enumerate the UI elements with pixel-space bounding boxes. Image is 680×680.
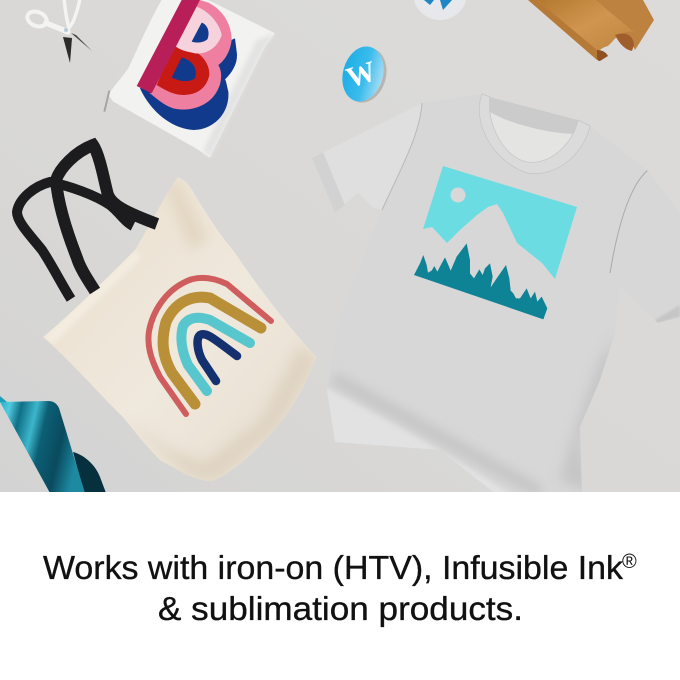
bag body: [43, 177, 317, 481]
right side shadow: [562, 349, 609, 489]
letter B pale bowl: [176, 7, 222, 54]
letter B pink: [150, 0, 232, 110]
pouch right edge shade: [203, 33, 275, 157]
caption text: [43, 549, 637, 627]
back collar band: [490, 97, 578, 134]
icon: scissors: [25, 0, 92, 63]
teal foil roll: [0, 396, 106, 493]
badge: blue W: W: [343, 55, 380, 95]
right shoulder seam: [610, 170, 648, 273]
front strap: [56, 145, 157, 291]
tote bag with rainbow: [17, 145, 318, 482]
pouch body: [108, 0, 275, 157]
gold glitter foil roll: [528, 0, 654, 61]
right cuff: [656, 306, 680, 322]
letter B navy shadow: [140, 38, 237, 130]
letter B red inner: [157, 47, 209, 95]
left shoulder seam: [382, 103, 422, 210]
badge: white W: [413, 0, 467, 20]
print: moon: [450, 188, 466, 202]
rainbow print: [148, 278, 271, 414]
left cuff: [312, 153, 344, 212]
zipper pull: [104, 91, 109, 112]
pouch with letter B: [104, 0, 275, 157]
print: sky: [423, 166, 577, 279]
caption text: Works with iron-on (HTV), Infusible Ink: [43, 549, 624, 586]
badge: blue W: [336, 42, 393, 107]
left sleeve light: [312, 103, 422, 213]
shirt collar: [479, 94, 590, 174]
print: tree line: [414, 243, 547, 319]
caption text: ®: [622, 551, 637, 573]
hem light area: [327, 390, 504, 492]
photo background: [0, 0, 680, 492]
back strap: [17, 182, 133, 299]
white caption panel: [0, 492, 680, 680]
fold shadow: [333, 378, 540, 492]
B counter bottom: [172, 57, 196, 81]
letter B maroon stem: [137, 0, 200, 93]
shirt body: [312, 94, 680, 492]
caption text: & sublimation products.: [158, 590, 523, 627]
t-shirt: [312, 94, 680, 497]
B counter top: [192, 23, 209, 43]
shirt inner neck: [490, 112, 572, 162]
